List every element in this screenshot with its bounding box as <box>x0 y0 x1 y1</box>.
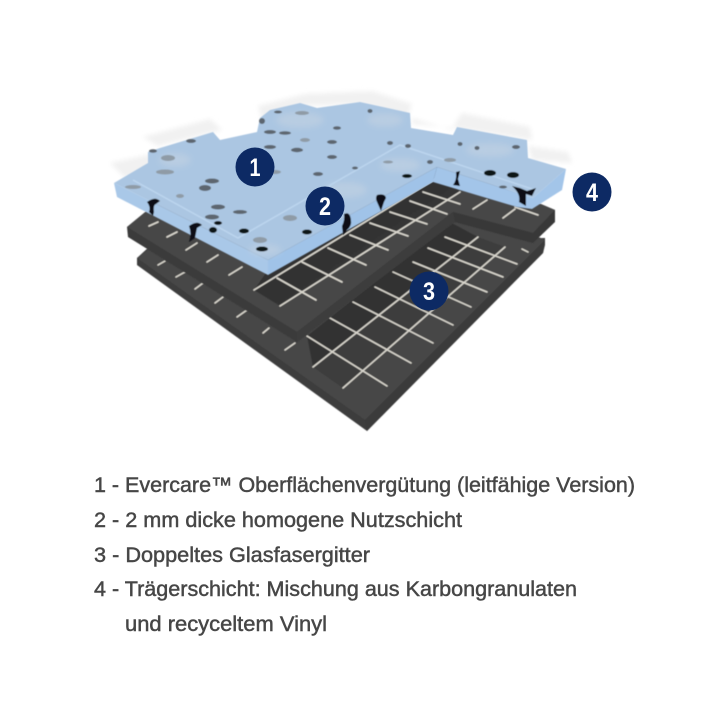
badge 2: 2 <box>319 193 331 221</box>
badge 4: 4 <box>586 179 598 207</box>
top surface <box>114 102 566 260</box>
legend item 2: 2 - 2 mm dicke homogene Nutzschicht <box>94 509 462 532</box>
left side face <box>114 183 268 275</box>
badge 3: 3 <box>423 278 435 306</box>
badge 1: 1 <box>250 154 261 182</box>
badge 1 <box>236 148 274 186</box>
legend text <box>94 474 635 636</box>
ghost protective film above tile <box>110 91 572 178</box>
seam lines <box>133 145 535 238</box>
legend item 3: 3 - Doppeltes Glasfasergitter <box>94 544 370 567</box>
legend item 4 continued: und recyceltem Vinyl <box>125 613 327 636</box>
dark zones of bottom grid <box>307 222 478 367</box>
inner side face <box>268 167 437 275</box>
glass fibre grid, middle layer <box>149 176 538 306</box>
grey pale flecks <box>125 111 456 243</box>
badge 4 <box>572 172 612 212</box>
pale mottling on top surface <box>159 112 514 256</box>
speckles <box>149 109 520 220</box>
badge 3 <box>410 272 448 310</box>
glass fibre grid, bottom layer <box>158 237 528 388</box>
black interlock joints <box>147 171 536 242</box>
dark zone of middle grid <box>254 167 460 306</box>
black cavities <box>209 170 519 252</box>
layered floor tile illustration <box>110 91 572 431</box>
legend item 4: 4 - Trägerschicht: Mischung aus Karbongranulaten <box>94 578 577 601</box>
blue wear layer tile <box>114 102 566 275</box>
legend item 1: 1 - Evercare™ Oberflächenvergütung (leitfähige Version) <box>94 474 635 497</box>
bottom carrier layer <box>137 200 545 431</box>
right front side face <box>433 167 566 209</box>
badge 2 <box>306 186 344 226</box>
middle carrier layer <box>127 160 555 342</box>
